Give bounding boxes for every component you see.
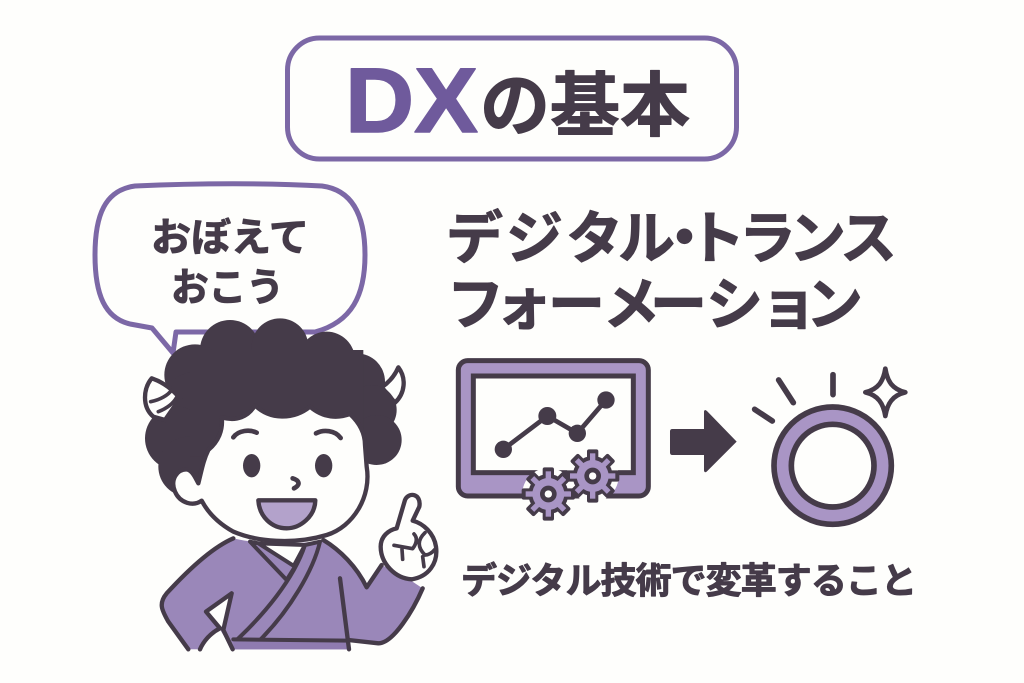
right eyebrow <box>316 431 341 438</box>
left collar band <box>250 542 295 580</box>
lower gear <box>522 467 575 521</box>
right eye <box>315 454 332 477</box>
collar underlayer <box>258 543 305 567</box>
character: oni child pointing <box>145 318 436 651</box>
nose <box>293 478 298 488</box>
upper gear <box>566 449 619 503</box>
main term line 1: デジタル・トランス <box>446 207 897 271</box>
caption: デジタル技術で変革すること <box>461 560 917 601</box>
face <box>173 405 367 541</box>
icon: ring (maru) <box>774 407 891 524</box>
belt top line <box>233 639 348 641</box>
sleeve seam <box>340 578 349 649</box>
bubble text line 1: おぼえて <box>151 217 309 260</box>
monitor <box>458 361 648 496</box>
title box <box>288 38 736 159</box>
left eye <box>243 454 260 477</box>
speech bubble <box>95 184 365 353</box>
arrow <box>670 410 737 472</box>
title text: DX <box>345 50 478 152</box>
right collar band <box>237 542 320 640</box>
pointing hand <box>381 495 436 579</box>
left eyebrow <box>233 431 257 437</box>
mouth <box>258 500 315 528</box>
sparkle rays <box>755 375 833 421</box>
sparkle star <box>865 369 905 416</box>
arm gap <box>188 593 233 651</box>
hair <box>145 318 402 497</box>
gears <box>522 449 619 521</box>
title text: suffix: の基本 <box>480 67 690 145</box>
kimono outline <box>162 538 423 649</box>
bubble text line 2: おこう <box>171 267 284 310</box>
icon: monitor with chart and gears <box>458 361 905 524</box>
line chart <box>495 391 615 458</box>
kimono <box>162 538 423 651</box>
left horn <box>145 378 180 420</box>
belt <box>233 639 348 649</box>
right horn <box>382 367 404 403</box>
main term line 2: フォーメーション <box>447 273 863 337</box>
